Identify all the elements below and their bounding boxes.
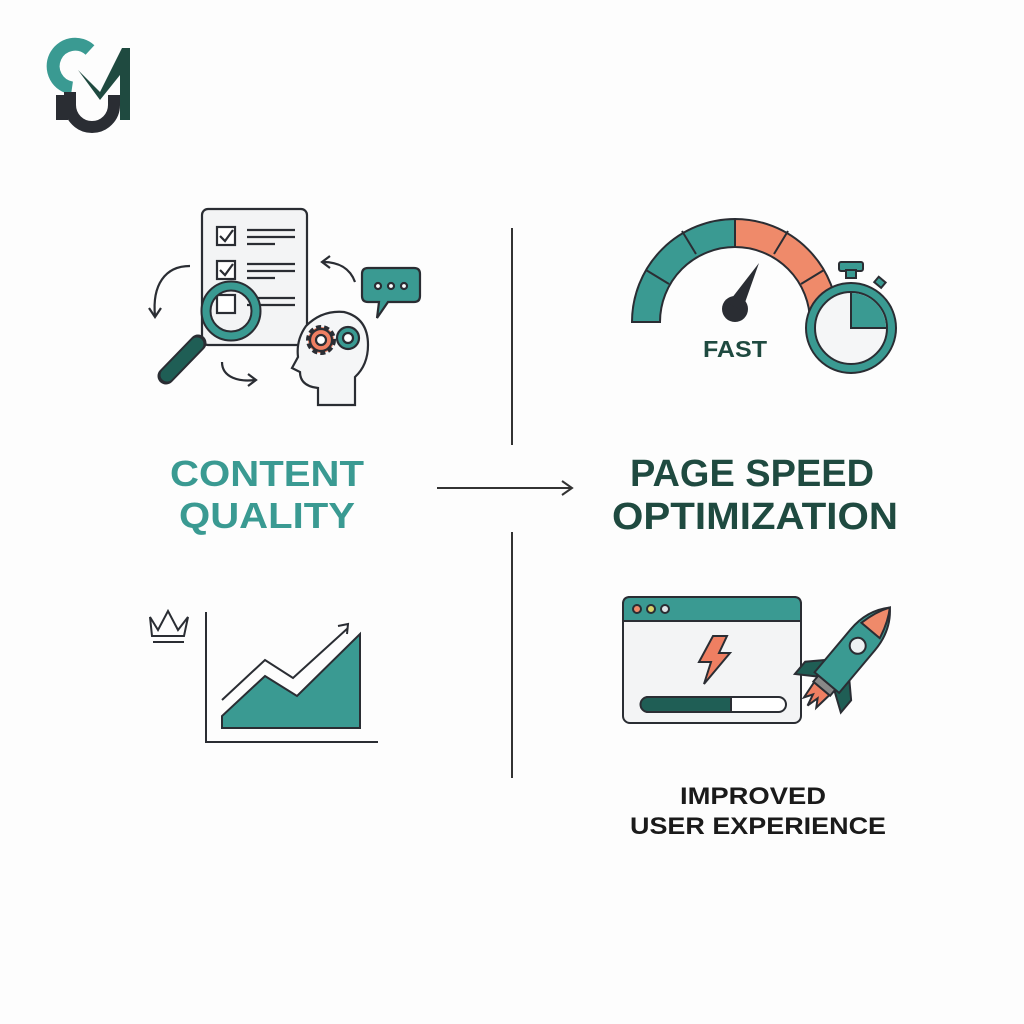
icon: browser window [623, 597, 801, 723]
icon: rocket [785, 588, 913, 725]
text: improved user experience [630, 783, 886, 840]
text: improved user experience: IMPROVED [680, 783, 826, 810]
heading: page speed optimization [612, 453, 898, 538]
heading: content quality [170, 453, 364, 536]
chart: growth [150, 611, 378, 742]
gauge [632, 219, 838, 362]
logo [53, 44, 130, 127]
icon: stopwatch [806, 262, 896, 373]
heading: page speed optimization: PAGE SPEED [630, 453, 874, 495]
divider vertical [511, 228, 513, 445]
icon: crown [150, 611, 188, 642]
label: fast: FAST [703, 336, 767, 362]
text: improved user experience: USER EXPERIENCE [630, 813, 886, 840]
icon: content quality illustration [149, 209, 420, 405]
heading: content quality: CONTENT [170, 453, 364, 494]
heading: page speed optimization: OPTIMIZATION [612, 496, 898, 538]
heading: content quality: QUALITY [179, 495, 355, 536]
arrow: center [437, 481, 572, 495]
